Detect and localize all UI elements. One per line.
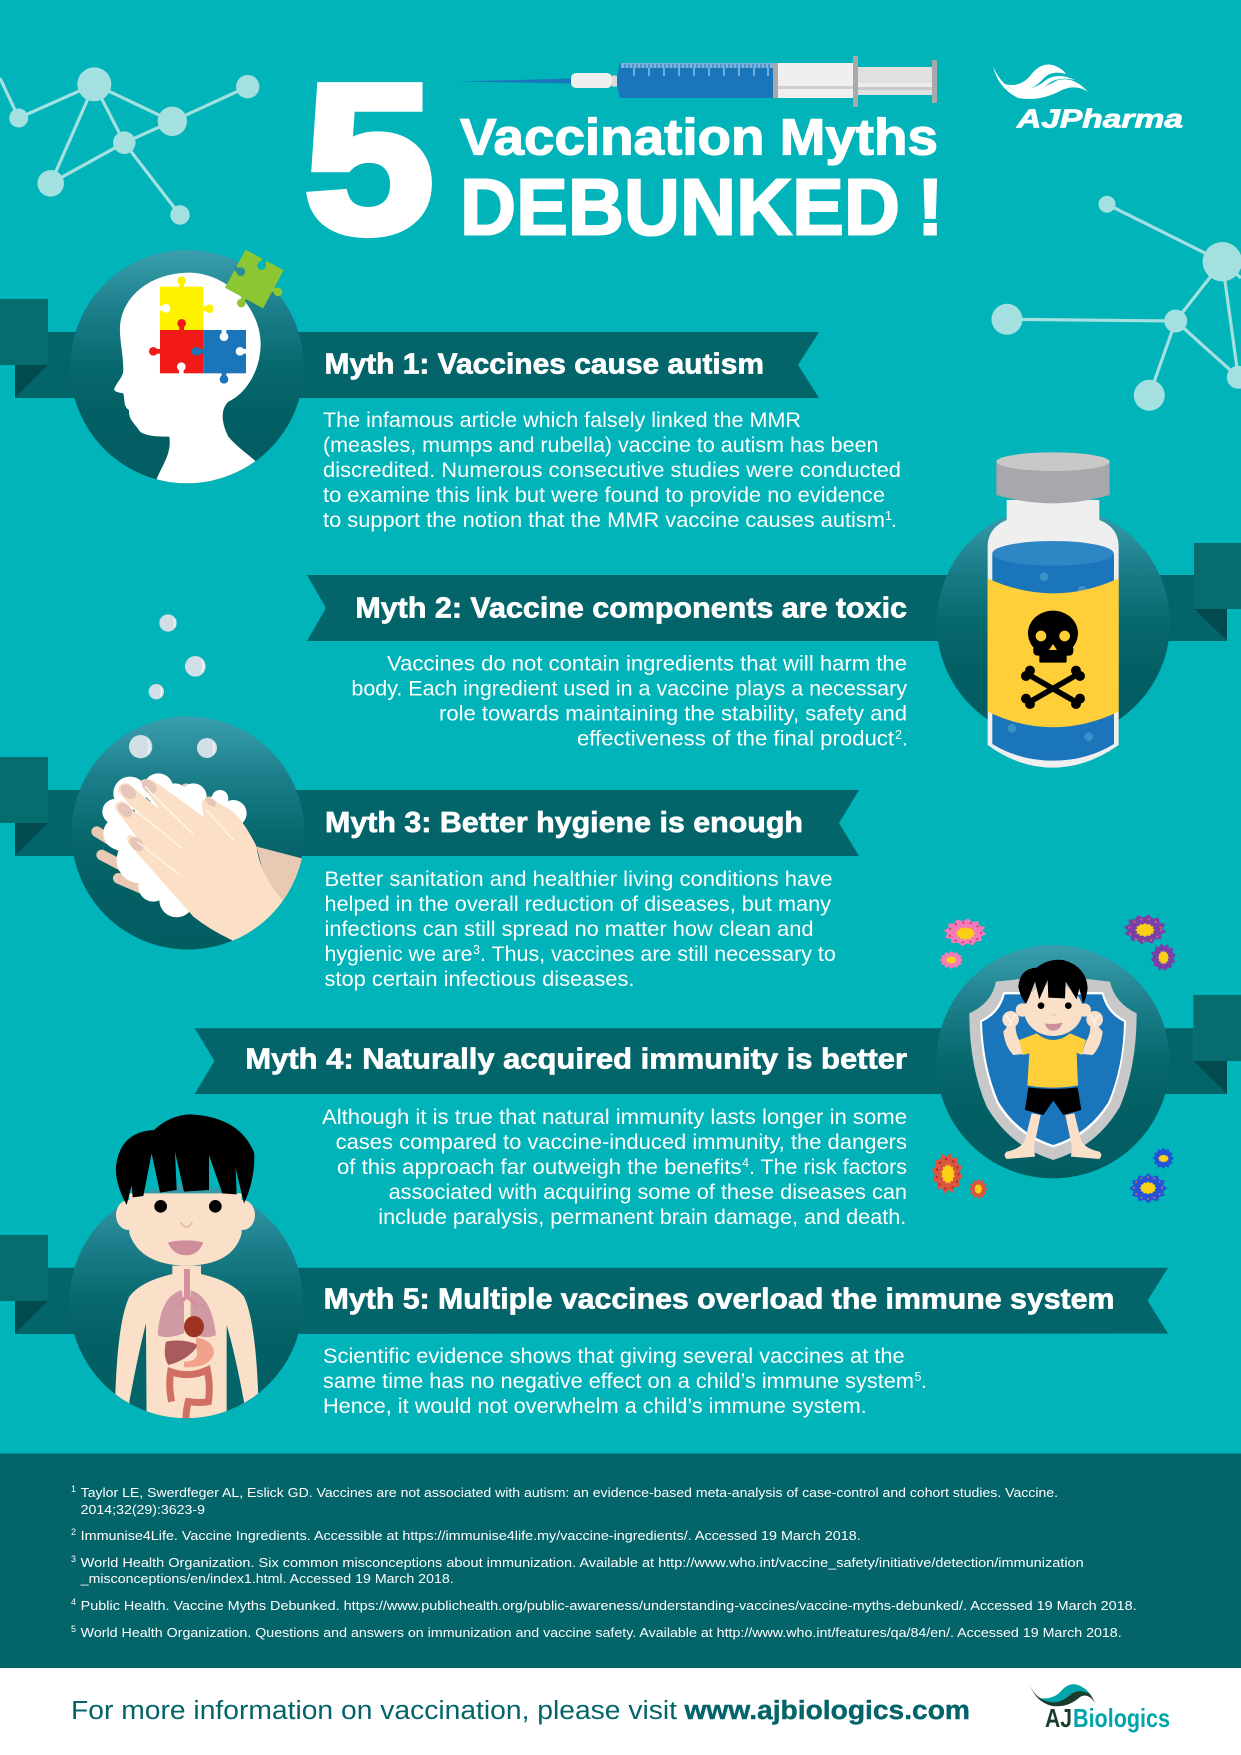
panel: references bbox=[0, 1454, 1241, 1668]
logo: AJBiologics: Biologics bbox=[1073, 1703, 1170, 1733]
heading: myth 5: Myth 5: Multiple vaccines overload the immune system bbox=[324, 1283, 1114, 1315]
text: myth 5 body: same time has no negative effect on a child’s immune system bbox=[323, 1370, 914, 1393]
ribbon: myth 3 bbox=[0, 757, 859, 856]
text: myth 2 body: effectiveness of the final product bbox=[577, 728, 894, 751]
molecule: top right bbox=[992, 196, 1241, 411]
text: myth 3 body: hygienic we are bbox=[324, 943, 472, 966]
text: myth 4 body: of this approach far outweigh the benefits bbox=[337, 1156, 742, 1179]
molecule: top left bbox=[0, 67, 259, 225]
text: myth 1 body bbox=[323, 409, 901, 532]
text: myth 3 body bbox=[324, 868, 836, 991]
panel: myth 5 bbox=[0, 1114, 1168, 1433]
text: call to action bbox=[71, 1697, 970, 1725]
text: myth 2 body: . bbox=[902, 728, 908, 751]
text: myth 2 body: role towards maintaining the stability, safety and bbox=[439, 703, 907, 726]
text: myth 2 body: Vaccines do not contain ingredients that will harm the bbox=[387, 653, 907, 676]
reference 2: Immunise4Life. Vaccine Ingredients. Accessible at https://immunise4life.my/vaccine-ingredients/. Accessed 19 March 2018. bbox=[81, 1528, 861, 1543]
title: DEBUNKED: ! bbox=[917, 162, 944, 252]
icon: washing hands bbox=[72, 614, 308, 957]
text: myth 3 body: . Thus, vaccines are still necessary to bbox=[480, 943, 836, 966]
reference 5: 5 bbox=[71, 1624, 76, 1634]
panel: footer bbox=[0, 1668, 1241, 1755]
text: myth 4 body bbox=[322, 1106, 907, 1229]
text: myth 3 body: stop certain infectious diseases. bbox=[324, 968, 634, 991]
text: myth 4 body: . The risk factors bbox=[749, 1156, 907, 1179]
heading: myth 4: Myth 4: Naturally acquired immunity is better bbox=[245, 1043, 907, 1075]
reference 3: _misconceptions/en/index1.html. Accessed 19 March 2018. bbox=[80, 1571, 454, 1586]
text: myth 3 body: helped in the overall reduction of diseases, but many bbox=[324, 893, 832, 916]
title: DEBUNKED: DEBUNKED bbox=[460, 162, 900, 252]
logo: AJBiologics bbox=[1030, 1684, 1170, 1733]
ribbon: myth 5 bbox=[0, 1235, 1168, 1334]
text: myth 4 body: include paralysis, permanent brain damage, and death. bbox=[378, 1206, 906, 1229]
text: myth 5 body: . bbox=[921, 1370, 927, 1393]
text: myth 2 body: 2 bbox=[895, 728, 902, 742]
icon: syringe bbox=[460, 56, 937, 107]
text: call to action: www.ajbiologics.com bbox=[683, 1697, 970, 1725]
reference 4: Public Health. Vaccine Myths Debunked. https://www.publichealth.org/public-awareness/understanding-vaccines/vaccine-myths-debunked/. Accessed 19 March 2018. bbox=[81, 1598, 1137, 1613]
reference 1: Taylor LE, Swerdfeger AL, Eslick GD. Vaccines are not associated with autism: an evidence-based meta-analysis of case-control and cohort studies. Vaccine. bbox=[81, 1485, 1058, 1500]
ribbon: myth 1 bbox=[0, 299, 819, 398]
text: myth 1 body: discredited. Numerous consecutive studies were conducted bbox=[323, 459, 901, 482]
text: myth 1 body: . bbox=[891, 509, 897, 532]
heading: myth 2: Myth 2: Vaccine components are toxic bbox=[355, 592, 907, 624]
text: myth 2 body: body. Each ingredient used in a vaccine plays a necessary bbox=[351, 678, 908, 701]
panel: myth 2 bbox=[307, 452, 1241, 768]
text: myth 4 body: associated with acquiring some of these diseases can bbox=[389, 1181, 907, 1204]
reference 3 bbox=[71, 1554, 1084, 1586]
panel: myth 1 bbox=[0, 249, 901, 532]
text: myth 1 body: to support the notion that the MMR vaccine causes autism bbox=[323, 509, 885, 532]
text: myth 1 body: 1 bbox=[885, 509, 892, 523]
icon: child with shield bbox=[936, 945, 1170, 1178]
text: myth 3 body: Better sanitation and healthier living conditions have bbox=[324, 868, 832, 891]
text: myth 4 body: cases compared to vaccine-induced immunity, the dangers bbox=[336, 1131, 907, 1154]
icon: head with puzzle bbox=[70, 249, 304, 503]
panel: myth 4 bbox=[195, 912, 1241, 1229]
title: Vaccination Myths: Vaccination Myths bbox=[460, 108, 938, 166]
icon: poison vial bbox=[937, 452, 1170, 768]
ribbon: myth 2 bbox=[307, 543, 1241, 641]
text: myth 5 body: 5 bbox=[914, 1370, 922, 1384]
text: myth 1 body: to examine this link but were found to provide no evidence bbox=[323, 484, 885, 507]
reference 4: 4 bbox=[71, 1597, 76, 1607]
reference 3: World Health Organization. Six common misconceptions about immunization. Available at http://www.who.int/vaccine_safety/initiative/detection/immunization bbox=[81, 1555, 1084, 1570]
logo: AJBiologics: AJ bbox=[1045, 1703, 1072, 1733]
heading: myth 3: Myth 3: Better hygiene is enough bbox=[325, 807, 803, 839]
text: myth 3 body: infections can still spread no matter how clean and bbox=[324, 918, 814, 941]
reference 3: 3 bbox=[71, 1554, 76, 1564]
panel: myth 3 bbox=[0, 614, 859, 991]
ribbon: myth 4 bbox=[195, 995, 1241, 1094]
text: myth 4 body: 4 bbox=[742, 1156, 749, 1170]
text: myth 4 body: Although it is true that natural immunity lasts longer in some bbox=[322, 1106, 907, 1129]
icon: germs bbox=[929, 912, 1180, 1203]
icon: child with organs bbox=[70, 1114, 303, 1433]
text: myth 5 body bbox=[323, 1345, 927, 1418]
logo: AJPharma: AJPharma bbox=[1016, 104, 1183, 134]
title: big 5: 5 bbox=[304, 40, 434, 277]
text: myth 1 body: (measles, mumps and rubella) vaccine to autism has been bbox=[323, 434, 878, 457]
text: myth 5 body: Scientific evidence shows that giving several vaccines at the bbox=[323, 1345, 905, 1368]
reference 1 bbox=[71, 1484, 1058, 1517]
icon: soap bubbles bbox=[129, 614, 217, 758]
reference 5: World Health Organization. Questions and answers on immunization and vaccine safety. Available at http://www.who.int/features/qa/84/en/. Accessed 19 March 2018. bbox=[81, 1625, 1122, 1640]
reference 1: 1 bbox=[71, 1484, 76, 1494]
text: myth 5 body: Hence, it would not overwhelm a child’s immune system. bbox=[323, 1395, 867, 1418]
text: call to action: For more information on vaccination, please visit bbox=[71, 1697, 677, 1725]
text: myth 3 body: 3 bbox=[473, 943, 480, 957]
logo: AJPharma bbox=[993, 64, 1183, 134]
heading: myth 1: Myth 1: Vaccines cause autism bbox=[324, 348, 764, 380]
text: myth 2 body bbox=[351, 653, 908, 751]
reference 1: 2014;32(29):3623-9 bbox=[81, 1502, 205, 1517]
reference 2: 2 bbox=[71, 1527, 76, 1537]
text: myth 1 body: The infamous article which falsely linked the MMR bbox=[323, 409, 801, 432]
